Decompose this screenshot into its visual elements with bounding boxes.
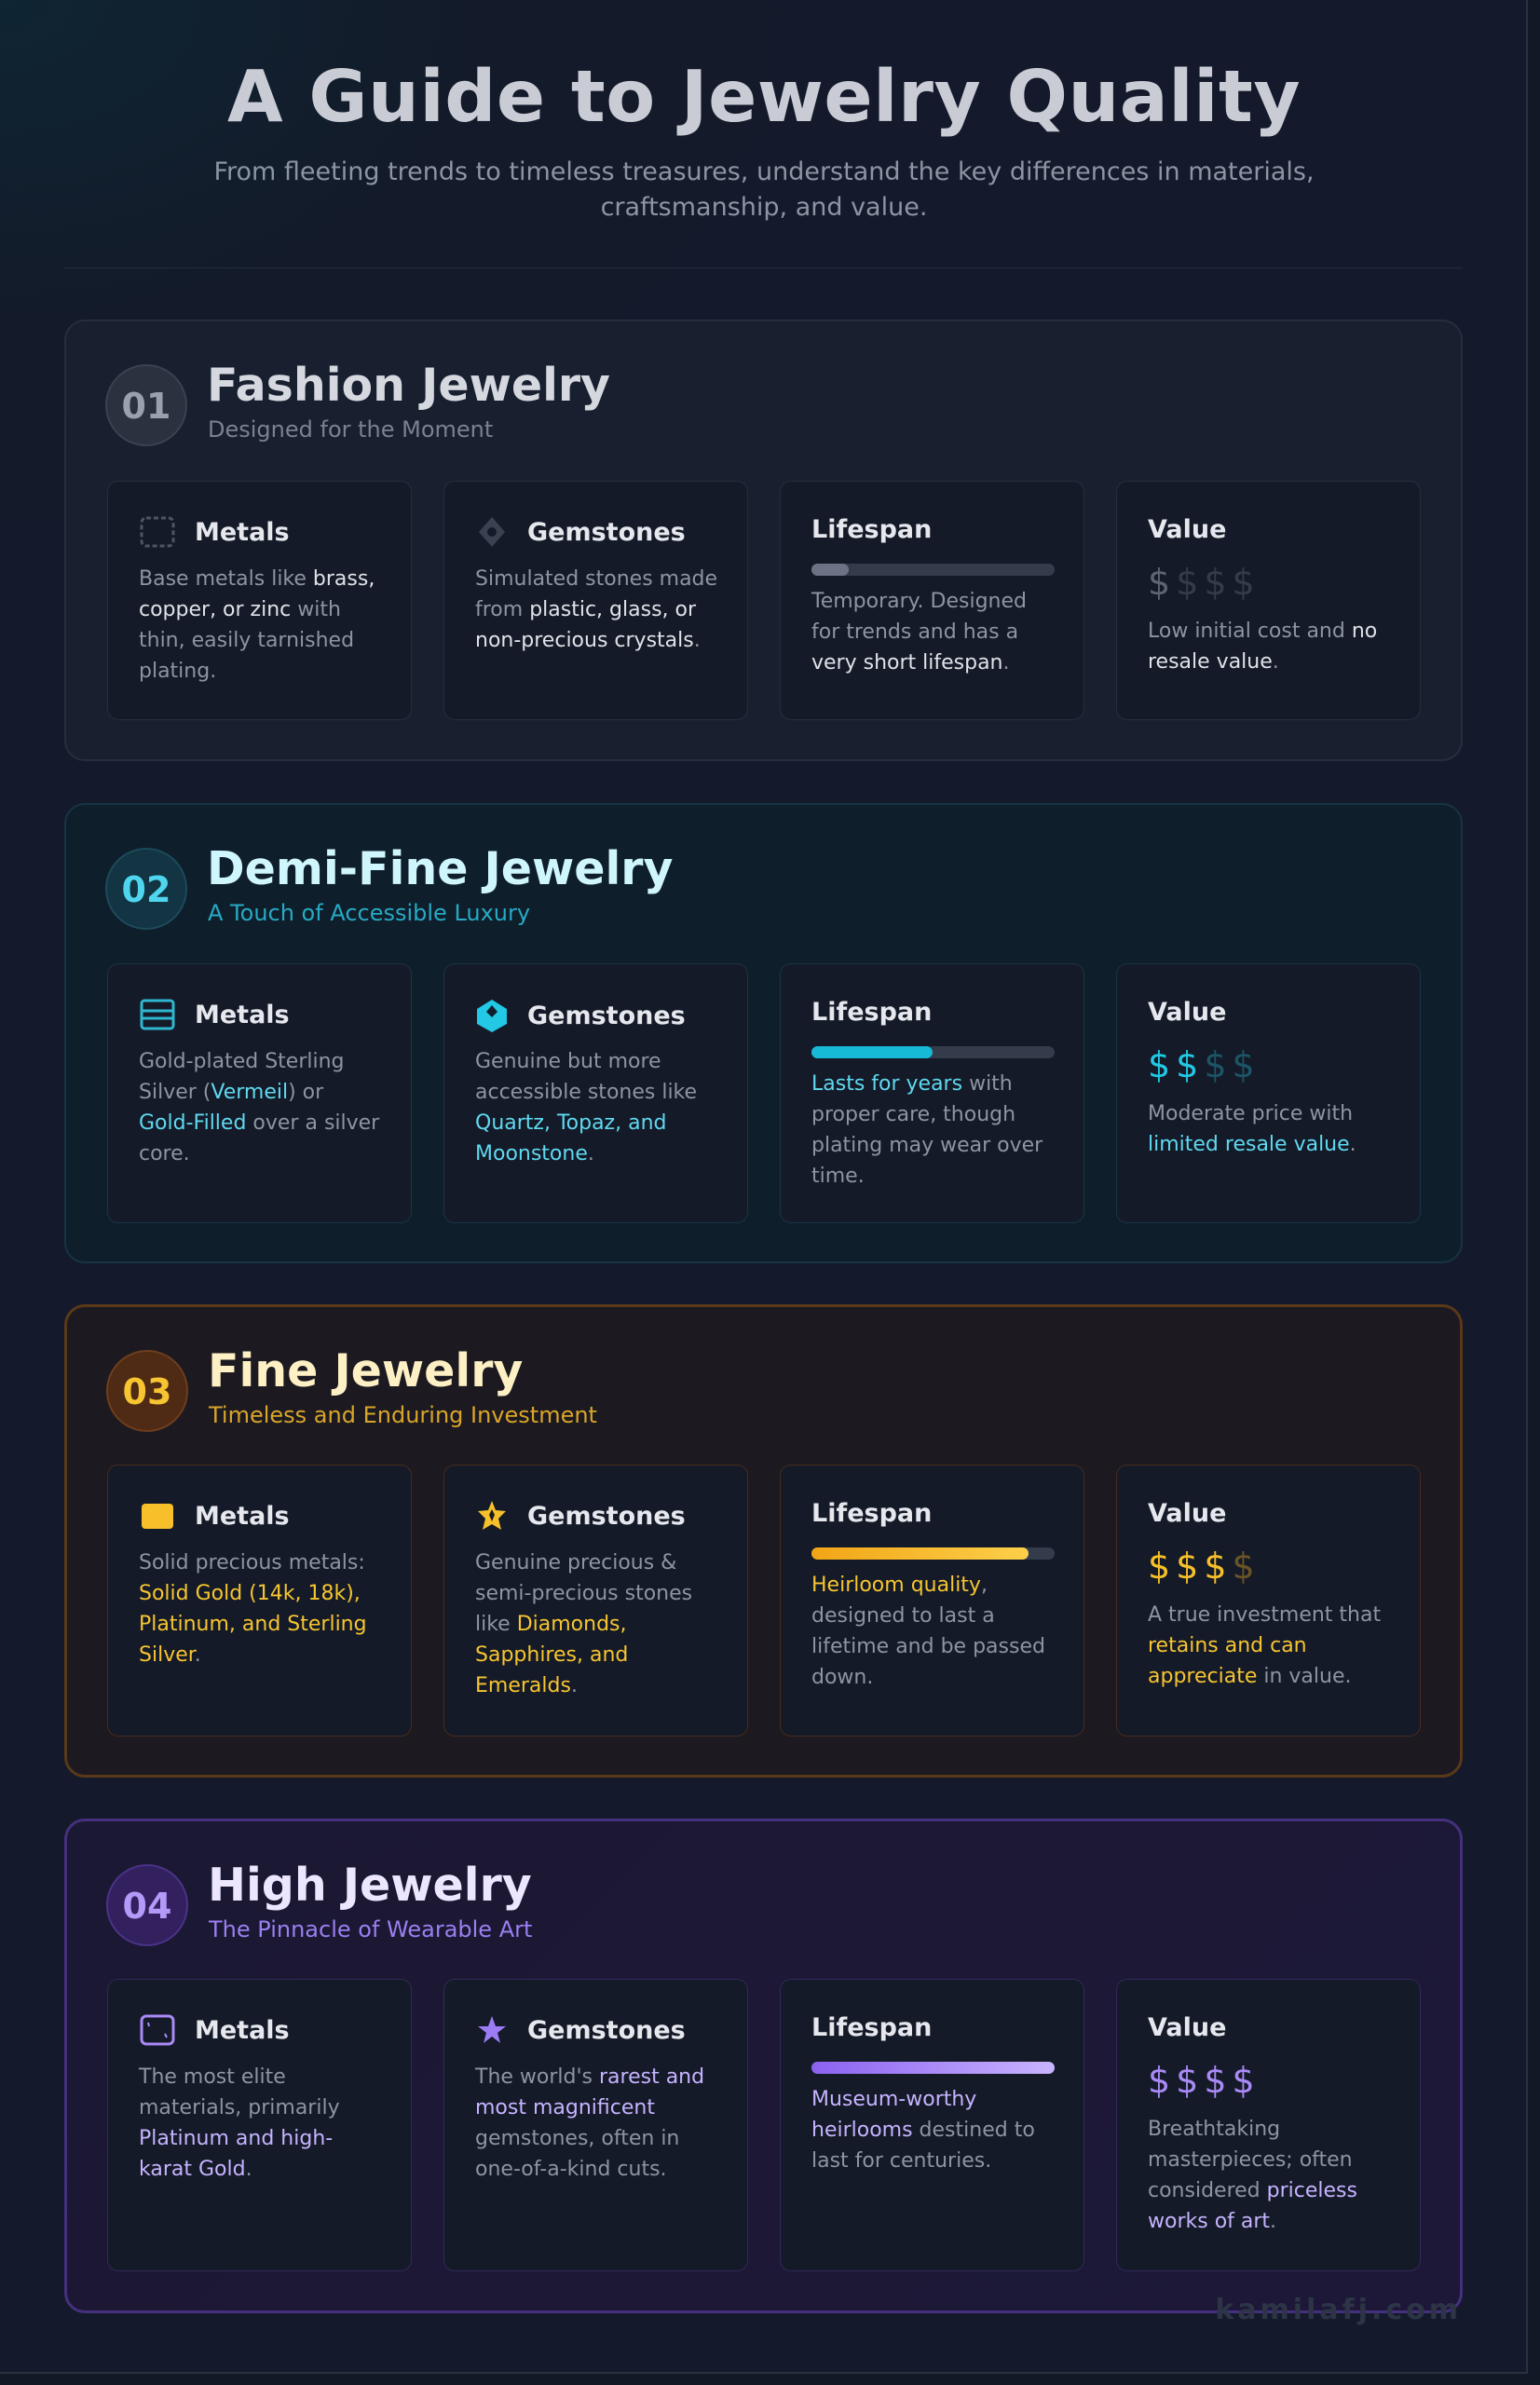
- card: value: [1116, 1465, 1421, 1737]
- panel: fashion jewelry: [64, 320, 1463, 761]
- lifespan bar: [811, 2062, 1055, 2074]
- value dollars: $$$$: [1148, 562, 1261, 603]
- card: value: [1116, 1979, 1421, 2271]
- badge 01: [105, 364, 187, 446]
- gemstones heading: [477, 1000, 686, 1032]
- gemstones heading: Gemstones: [527, 1502, 686, 1530]
- watermark: kamilafj.com: [1215, 2294, 1462, 2326]
- heading: Fashion Jewelry: [207, 359, 610, 412]
- panel: high jewelry: [64, 1819, 1463, 2313]
- lifespan heading: Lifespan: [811, 998, 932, 1027]
- gemstones text: Simulated stones made from plastic, glass, or non-precious crystals.: [475, 567, 717, 652]
- badge 01: 01: [122, 386, 170, 427]
- panel: fine jewelry: [64, 1304, 1463, 1778]
- card: metals: [107, 963, 412, 1223]
- metals text: The most elite materials, primarily Platinum and high-​karat Gold.: [139, 2065, 340, 2181]
- lifespan bar: [811, 564, 1055, 576]
- panel: demi-fine jewelry: [64, 803, 1463, 1263]
- card: metals: [107, 481, 412, 720]
- metals text: Gold-plated Sterling Silver (Vermeil) or Gold-Filled over a silver core.: [139, 1050, 379, 1165]
- lifespan heading: Lifespan: [811, 2013, 932, 2042]
- lifespan text: Temporary. Designed for trends and has a very short lifespan.: [811, 590, 1027, 675]
- badge 02: 02: [122, 869, 170, 910]
- card: metals: [107, 1465, 412, 1737]
- heading: Demi-Fine Jewelry: [207, 842, 673, 895]
- value heading: Value: [1148, 2013, 1226, 2042]
- gemstones heading: Gemstones: [527, 1001, 686, 1030]
- badge 03: [106, 1350, 188, 1432]
- metals heading: Metals: [195, 518, 290, 546]
- card: lifespan: [780, 963, 1084, 1223]
- card: value: [1116, 963, 1421, 1223]
- value text: Breathtaking masterpieces; often considered priceless works of art.: [1148, 2118, 1357, 2233]
- card: lifespan: [780, 1465, 1084, 1737]
- badge 04: 04: [123, 1886, 171, 1927]
- value heading: Value: [1148, 515, 1226, 544]
- card: lifespan: [780, 481, 1084, 720]
- lifespan text: Lasts for years with proper care, though plating may wear over time.: [811, 1072, 1043, 1188]
- title: A Guide to Jewelry Quality: [227, 56, 1301, 139]
- badge 02: [105, 848, 187, 930]
- lifespan heading: Lifespan: [811, 515, 932, 544]
- tagline: A Touch of Accessible Luxury: [208, 900, 530, 926]
- metals heading: [140, 516, 290, 548]
- gemstones heading: Gemstones: [527, 518, 686, 546]
- value dollars: $$$$: [1148, 1546, 1261, 1587]
- metals text: Solid precious metals: Solid Gold (14k, 18k), Platinum, and Sterling Silver.: [139, 1551, 367, 1667]
- heading: Fine Jewelry: [208, 1344, 523, 1397]
- badge 04: [106, 1864, 188, 1946]
- metals heading: [142, 1502, 290, 1530]
- tagline: Designed for the Moment: [208, 416, 493, 443]
- card: lifespan: [780, 1979, 1084, 2271]
- value text: A true investment that retains and can appreciate in value.: [1148, 1603, 1381, 1688]
- tagline: Timeless and Enduring Investment: [209, 1402, 597, 1428]
- lifespan bar: [811, 1547, 1055, 1560]
- gemstones text: The world's rarest and most magnificent gemstones, often in one-of-a-kind cuts.: [475, 2065, 704, 2181]
- value text: Low initial cost and no resale value.: [1148, 620, 1377, 674]
- gemstones text: Genuine precious & semi-precious stones like Diamonds, Sapphires, and Emeralds.: [475, 1551, 692, 1697]
- card: gemstones: [443, 1979, 748, 2271]
- metals text: Base metals like brass, copper, or zinc with thin, easily tarnished plating.: [139, 567, 375, 683]
- value heading: Value: [1148, 998, 1226, 1027]
- metals heading: Metals: [195, 1502, 290, 1530]
- gemstones heading: Gemstones: [527, 2016, 686, 2044]
- value heading: Value: [1148, 1499, 1226, 1528]
- tagline: The Pinnacle of Wearable Art: [209, 1916, 532, 1942]
- metals heading: Metals: [195, 1001, 290, 1029]
- metals heading: Metals: [195, 2016, 290, 2044]
- value dollars: $$$$: [1148, 2060, 1261, 2101]
- card: gemstones: [443, 1465, 748, 1737]
- lifespan bar: [811, 1046, 1055, 1058]
- lifespan text: Museum-worthy heirlooms destined to last for centuries.: [811, 2088, 1035, 2173]
- card: value: [1116, 481, 1421, 720]
- heading: High Jewelry: [208, 1859, 532, 1912]
- value dollars: $$$$: [1148, 1044, 1261, 1085]
- subtitle: From fleeting trends to timeless treasures, understand the key differences in materials, craftsmanship, and value.: [213, 157, 1315, 222]
- card: gemstones: [443, 963, 748, 1223]
- lifespan text: Heirloom quality, designed to last a lifetime and be passed down.: [811, 1574, 1045, 1689]
- metals heading: [140, 999, 290, 1030]
- value text: Moderate price with limited resale value.: [1148, 1102, 1356, 1156]
- lifespan heading: Lifespan: [811, 1499, 932, 1528]
- badge 03: 03: [123, 1371, 171, 1412]
- card: gemstones: [443, 481, 748, 720]
- card: metals: [107, 1979, 412, 2271]
- metals heading: [140, 2014, 290, 2046]
- gemstones text: Genuine but more accessible stones like Quartz, Topaz, and Moonstone.: [475, 1050, 697, 1165]
